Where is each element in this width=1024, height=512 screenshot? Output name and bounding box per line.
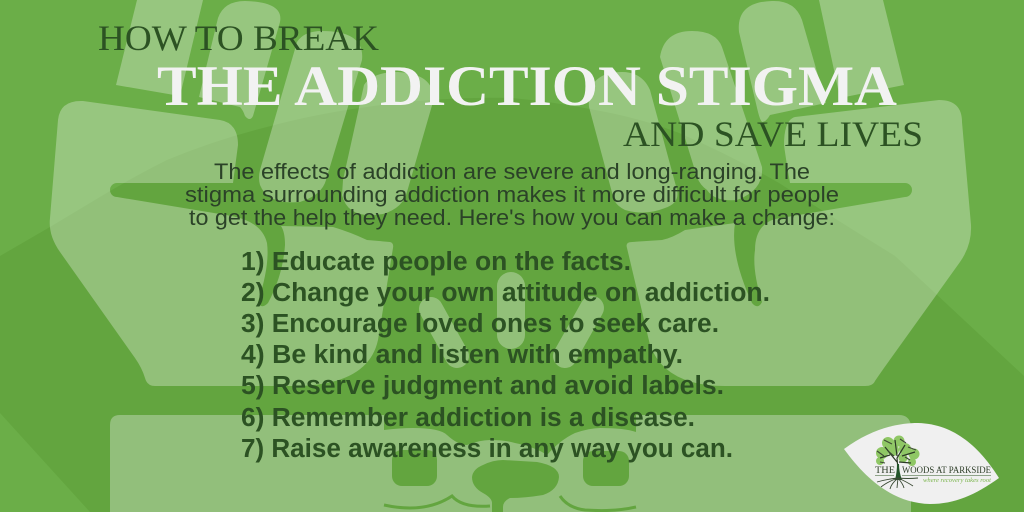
right chain hole	[583, 451, 629, 486]
left hand palm	[50, 101, 393, 386]
logo: the woods at parkside	[844, 423, 999, 504]
right finger one	[739, 1, 826, 122]
chain link edge right	[560, 496, 636, 511]
item 5: 5) Reserve judgment and avoid labels.	[241, 372, 724, 400]
right finger three	[589, 72, 678, 213]
item 4: 4) Be kind and listen with empathy.	[241, 341, 683, 369]
intro paragraph	[185, 159, 839, 230]
lower block with chain cutouts	[110, 415, 911, 512]
left finger three	[342, 72, 433, 215]
left finger one	[199, 1, 280, 119]
right hand palm	[627, 100, 971, 386]
right finger two	[660, 31, 762, 200]
logo wordmark: THE	[875, 465, 896, 475]
icon: tree canopy	[876, 436, 920, 466]
center chain pieces	[431, 286, 592, 356]
chain link edge left	[384, 496, 490, 508]
left chain hole	[392, 450, 437, 486]
title	[98, 18, 923, 154]
right slanted link	[565, 308, 592, 356]
item 1: 1) Educate people on the facts.	[241, 248, 631, 276]
left finger two	[259, 31, 362, 202]
intro line 1: The effects of addiction are severe and long-ranging. The	[214, 159, 810, 184]
logo rule	[875, 474, 991, 476]
item 6: 6) Remember addiction is a disease.	[241, 404, 695, 432]
item 3: 3) Encourage loved ones to seek care.	[241, 310, 719, 338]
left slanted link	[431, 309, 457, 356]
title line: how to break: HOW TO BREAK	[98, 18, 379, 58]
intro line 2: stigma surrounding addiction makes it more difficult for people	[185, 182, 839, 207]
item 2: 2) Change your own attitude on addiction.	[241, 279, 770, 307]
center link	[497, 286, 525, 335]
icon: tree trunk and branches	[880, 440, 915, 470]
logo leaf badge	[844, 423, 999, 504]
numbered list of actions	[241, 248, 770, 463]
lower light block with chain outline on top edge	[110, 415, 911, 512]
center chain hole	[472, 460, 559, 512]
icon: tree roots	[877, 478, 918, 489]
logo wordmark continued: WOODS AT PARKSIDE	[902, 465, 991, 475]
icon: tree trunk base	[895, 464, 902, 480]
title line: and save lives: AND SAVE LIVES	[623, 114, 923, 154]
icon: dark leaf speckle	[877, 439, 916, 463]
logo tagline: where recovery takes root	[923, 477, 991, 484]
raised fists illustration	[50, 0, 971, 386]
item 7: 7) Raise awareness in any way you can.	[241, 435, 733, 463]
intro line 3: to get the help they need. Here's how you can make a change:	[189, 205, 835, 230]
title line: the addiction stigma: THE ADDICTION STIGMA	[157, 55, 897, 118]
right wrist bar	[819, 0, 904, 98]
left wrist bar	[116, 0, 203, 96]
